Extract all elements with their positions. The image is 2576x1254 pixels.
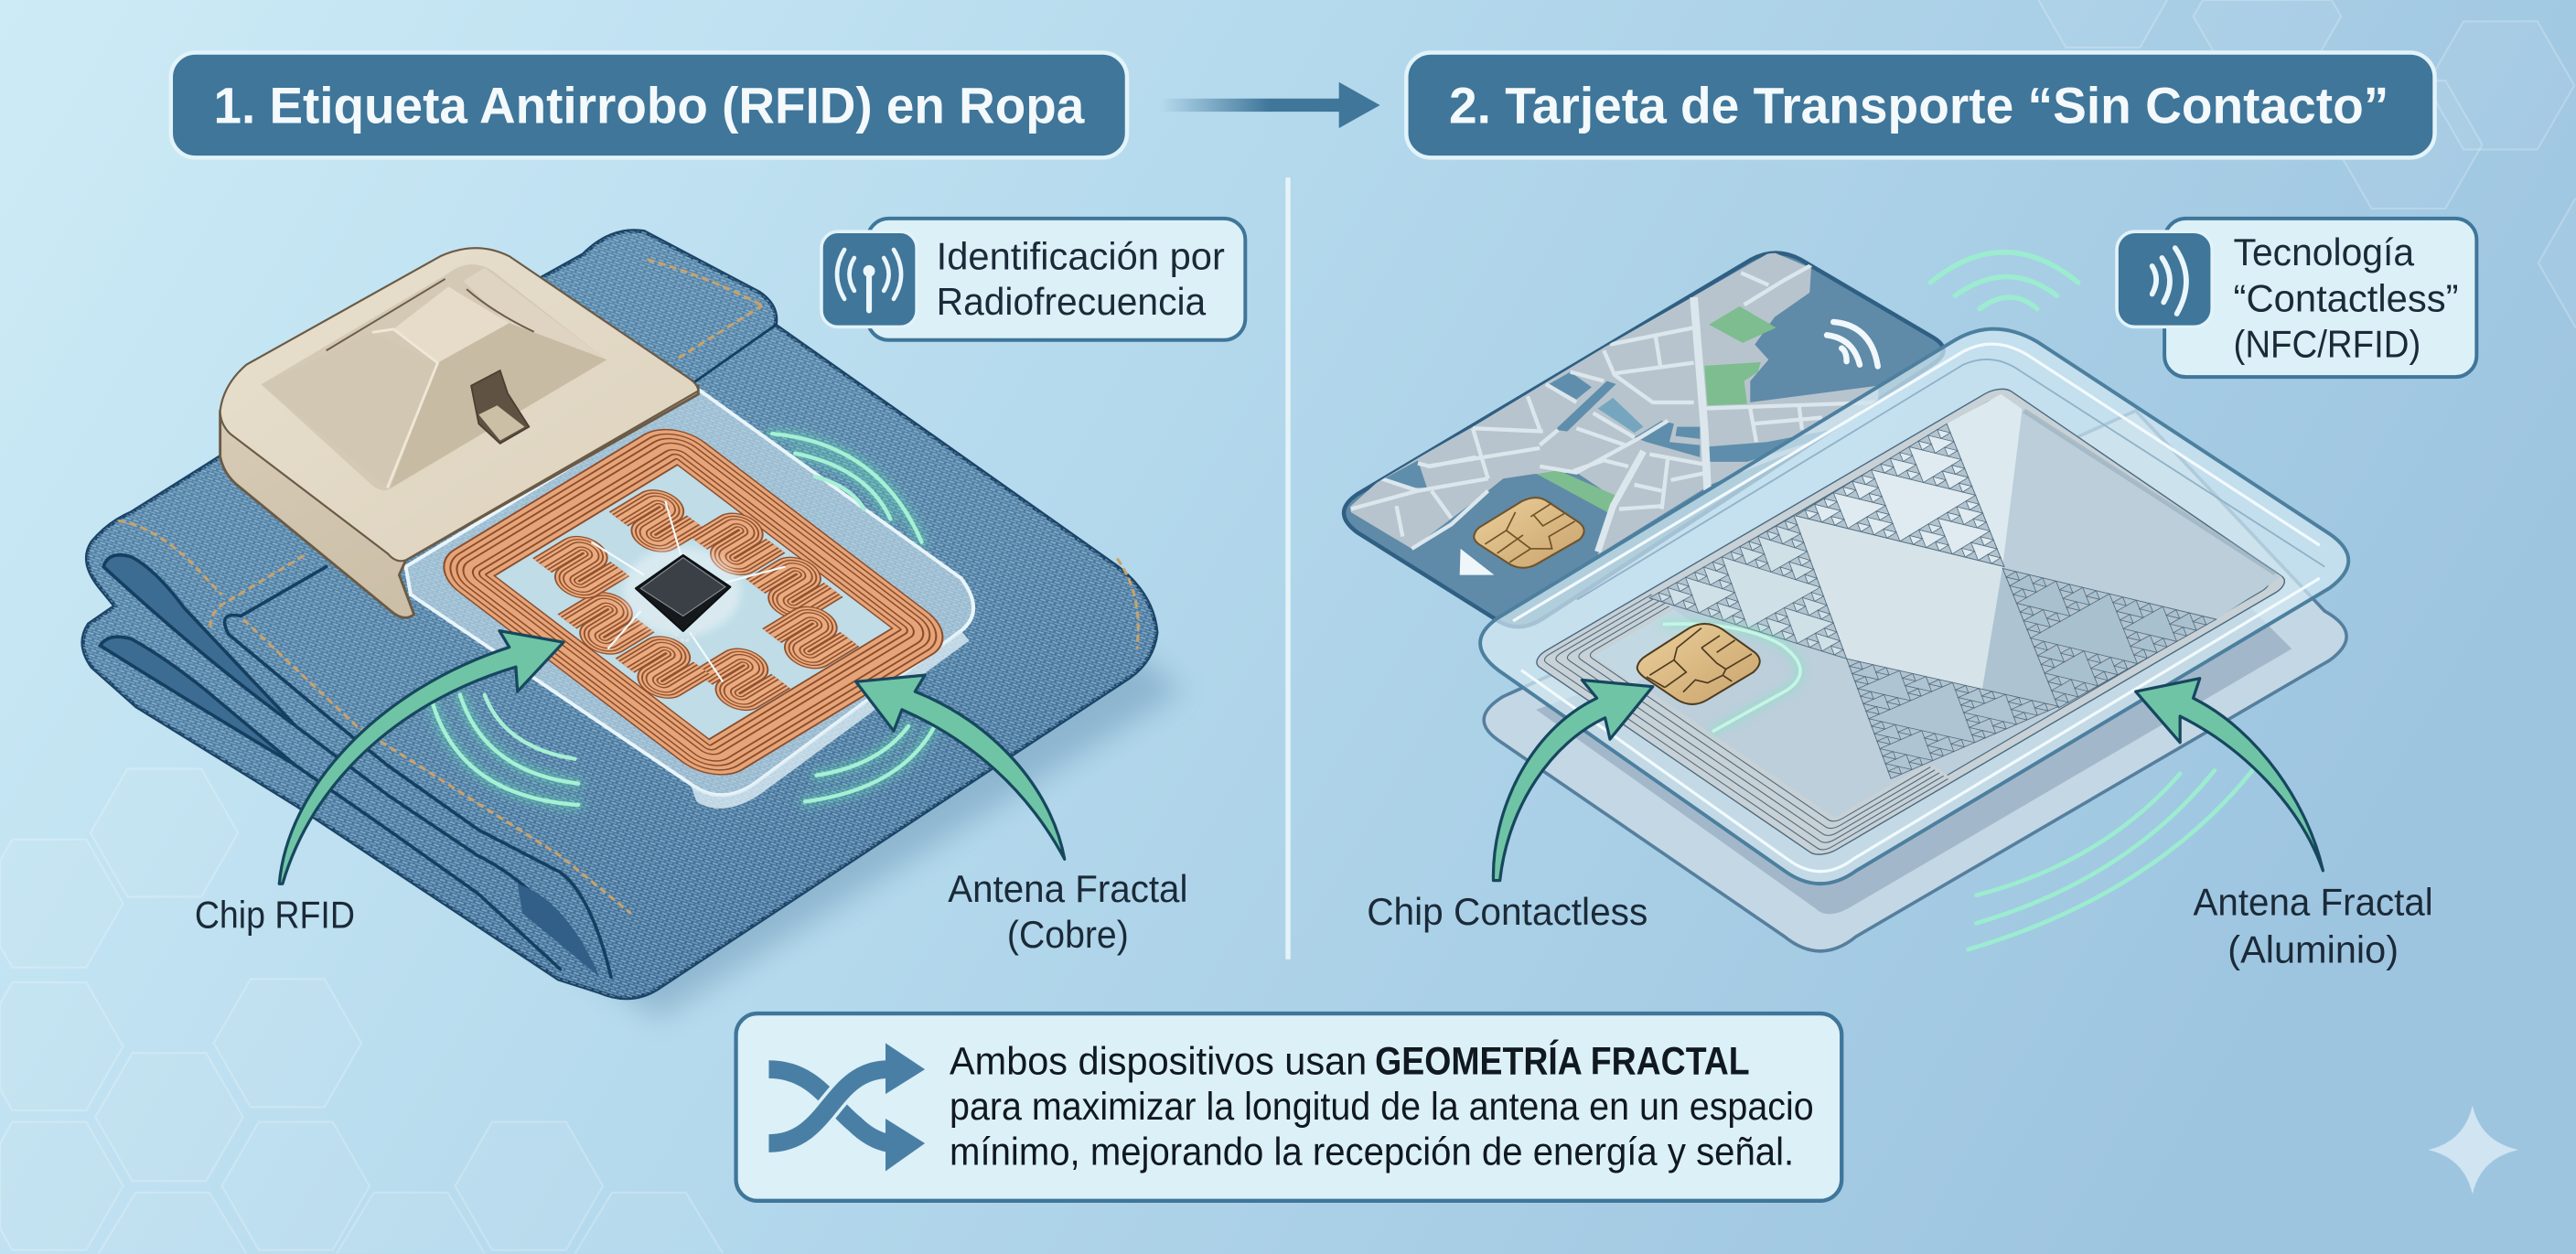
summary text: Ambos dispositivos usan (950, 1040, 1367, 1083)
denim fold pockets and lines (101, 326, 776, 978)
panel: RFID clothing tag (83, 230, 1183, 1018)
meander blocks (515, 477, 877, 727)
label: Antena Fractal (Cobre): (Cobre) (1007, 914, 1129, 956)
heading 2 (1406, 52, 2435, 157)
panel shading (1794, 394, 2282, 706)
anti-theft beige tag (220, 248, 698, 617)
summary text: GEOMETRÍA FRACTAL (1375, 1040, 1750, 1083)
RFID chip (636, 555, 733, 640)
arrow: aluminium antenna (2136, 679, 2323, 871)
map card wifi symbol (1827, 322, 1878, 366)
back plate of card (1484, 411, 2346, 951)
callout text: Identificación por (937, 236, 1225, 278)
bottom green signal waves (1969, 770, 2252, 949)
map water (1385, 371, 1828, 488)
signal glow on denim (432, 434, 937, 805)
icon: contactless waves (2117, 231, 2212, 327)
panel divider (1285, 177, 1291, 959)
callout text: (NFC/RFID) (2234, 324, 2420, 366)
summary callout (736, 1013, 1841, 1201)
summary text: mínimo, mejorando la recepción de energía y señal. (950, 1130, 1794, 1173)
transparent front card (1480, 329, 2348, 884)
label: Chip RFID: Chip RFID (195, 895, 355, 937)
transparent tag housing (406, 390, 973, 809)
summary text: para maximizar la longitud de la antena en un espacio (950, 1085, 1814, 1128)
callout text: “Contactless” (2234, 277, 2459, 319)
folded denim garment (83, 230, 1183, 1018)
tag front face (220, 386, 698, 617)
decorative sparkle star (2428, 1106, 2518, 1195)
map parks (1537, 306, 1776, 514)
tag recess (262, 264, 606, 490)
label: Antena Fractal (Cobre): Antena Fractal (948, 868, 1187, 910)
callout text: Tecnología (2234, 231, 2414, 273)
map card gold chip (1474, 498, 1584, 568)
label: Antena Fractal (Cobre) (948, 868, 1187, 956)
copper fractal antenna (442, 428, 945, 776)
panel: contactless transport card (1344, 252, 2348, 951)
callout text (2234, 231, 2459, 366)
denim orange stitching (118, 260, 1138, 914)
map transit card (1344, 252, 1944, 627)
icon: crossing arrows (768, 1043, 925, 1171)
outer copper coil (460, 441, 927, 763)
contactless gold chip (1637, 624, 1760, 704)
top green signal waves (1930, 252, 2078, 309)
arrow: chip RFID (279, 631, 564, 884)
callout text: Radiofrecuencia (937, 281, 1206, 323)
heading 2: 2. Tarjeta de Transporte “Sin Contacto” (1449, 78, 2388, 134)
icon: antenna (821, 231, 917, 327)
summary text (950, 1040, 1814, 1173)
green signal waves (432, 434, 937, 805)
silver antenna frame (1530, 384, 2292, 859)
label: Antena Fractal (Aluminio) (2194, 881, 2433, 970)
arrow: copper antenna (856, 675, 1065, 859)
label: Antena Fractal (Aluminio): (Aluminio) (2227, 928, 2399, 970)
callout text (937, 236, 1225, 323)
label: Chip Contactless: Chip Contactless (1367, 891, 1648, 933)
map roads (1351, 265, 1878, 552)
tag keyhole (471, 370, 529, 444)
arrow: chip contactless (1493, 681, 1653, 881)
green glow on card (1664, 624, 1800, 731)
callout: radiofrecuencia (821, 219, 1245, 340)
tag top face (220, 248, 698, 561)
heading 1: 1. Etiqueta Antirrobo (RFID) en Ropa (213, 78, 1085, 134)
label: Antena Fractal (Aluminio): Antena Fractal (2194, 881, 2433, 923)
callout: contactless (2117, 219, 2476, 377)
map land (1351, 252, 1878, 555)
arrow between headings (1160, 82, 1380, 128)
map card triangle (1460, 549, 1494, 575)
heading 1 (171, 52, 1127, 157)
Sierpinski fractal antenna (1649, 423, 2272, 826)
circuit sparkle (592, 501, 785, 681)
